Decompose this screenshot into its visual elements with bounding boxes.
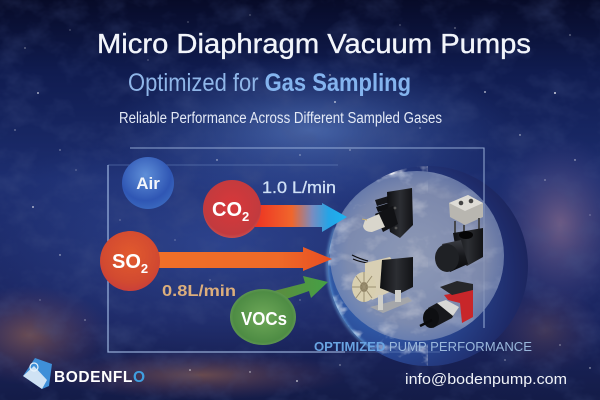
bubble: VOCs (230, 289, 296, 345)
logo: Bodenflo (23, 358, 145, 389)
label: 1.0 L/min: 1.0 L/min (262, 178, 336, 197)
wordmark: BODENFLO (54, 369, 145, 386)
arrow: VOCs flow to pump (270, 276, 328, 303)
arrow: SO2 flow to pump (150, 247, 332, 271)
pump: bottom right, red body and black motor (420, 281, 473, 328)
contact email: info@bodenpump.com (405, 372, 567, 388)
bubble: CO2: 2 (242, 209, 249, 224)
title: Micro Diaphragm Vacuum Pumps (97, 28, 531, 59)
frame: outlined panel (108, 148, 484, 352)
pump: top right, silver head on black motor (435, 195, 483, 272)
bubble: SO2: SO (112, 251, 141, 273)
translucent pump lens circle (330, 171, 505, 341)
label: 0.8 L/min: 0.8L/min (162, 283, 236, 300)
bubble: CO2: CO (212, 199, 242, 221)
pump: top left, black with white cylinder (362, 188, 413, 238)
bubble: Air: Air (136, 174, 160, 193)
globe: earth (328, 166, 528, 366)
bubble: CO2 (203, 180, 261, 238)
pump: centre left, cream fan head and black body (352, 255, 413, 313)
caption: optimized pump performance: OPTIMIZED PUMP PERFORMANCE (314, 339, 532, 354)
subtitle: Optimized for Gas Sampling (128, 69, 411, 97)
bubble: Air (122, 157, 174, 209)
icon: logo cube (23, 358, 52, 389)
bubble: SO2: 2 (141, 261, 148, 276)
tagline: Reliable Performance Across Different Sampled Gases (119, 110, 442, 127)
bubble: SO2 (100, 231, 160, 291)
arrow: CO2 flow to pump (255, 203, 347, 232)
bubble: VOCs: VOCs (241, 309, 287, 329)
